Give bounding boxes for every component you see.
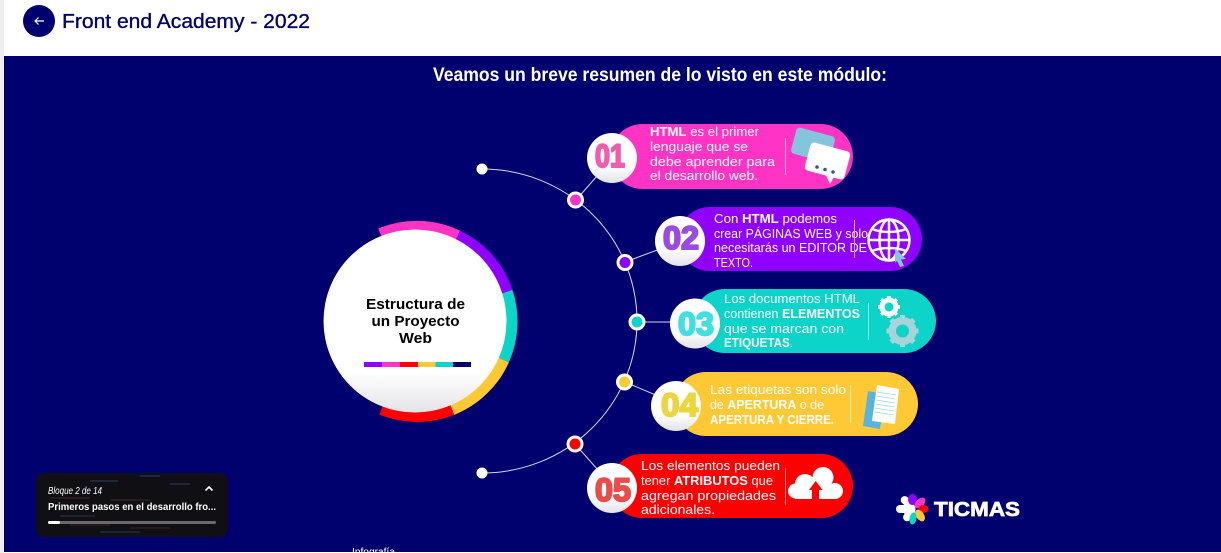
centre label: un Proyecto: [372, 313, 460, 330]
text 04: APERTURA Y CIERRE.: [710, 412, 834, 427]
back button icon: [23, 5, 55, 37]
progress card: [36, 473, 228, 537]
panel: item 03: [670, 289, 936, 353]
timeline node 3: [628, 314, 646, 330]
icon: cloud upload: [788, 467, 843, 499]
number badge 02: 02: [663, 220, 699, 256]
text 02: TEXTO.: [714, 255, 753, 270]
icon: gears: [878, 296, 918, 347]
number badge 03: 03: [678, 306, 714, 342]
panel: item 01: [587, 124, 853, 189]
timeline arc: [476, 164, 672, 478]
card title: Primeros pasos en el desarrollo fro...: [48, 502, 216, 513]
timeline node 2: [616, 254, 634, 271]
text 03: que se marcan con: [724, 321, 844, 336]
text 01: debe aprender para: [650, 154, 776, 169]
text 02: [714, 211, 868, 270]
number badge 02: [655, 216, 705, 266]
text 01: [650, 124, 776, 183]
number badge 01: 01: [595, 138, 625, 174]
panel: item 04: [651, 372, 918, 436]
logo: TICMAS: [896, 494, 1020, 525]
text 03: contienen ELEMENTOS: [724, 306, 860, 321]
card chevron icon: [206, 487, 212, 490]
text 03: ETIQUETAS.: [724, 335, 793, 350]
course title: Front end Academy - 2022: [62, 11, 310, 33]
centre label: [366, 296, 465, 347]
number badge 04: [651, 381, 701, 431]
panel: item 02: [655, 207, 922, 271]
number badge 04: 04: [661, 387, 698, 423]
text 03: [724, 291, 860, 350]
card progress bar: [48, 521, 216, 524]
timeline node 5: [566, 436, 584, 452]
large gear: [886, 315, 918, 347]
text 05: adicionales.: [641, 502, 715, 517]
number badge 03: [670, 298, 720, 348]
number badge 05: 05: [595, 472, 631, 508]
panel: item 05: [587, 454, 853, 518]
number badge 05: [587, 463, 637, 513]
central circle: Estructura de un Proyecto Web: [324, 227, 511, 415]
centre label: Estructura de: [366, 296, 465, 313]
heading: Veamos un breve resumen de lo visto en este módulo:: [433, 65, 887, 86]
timeline node 4: [616, 374, 633, 390]
text 04: de APERTURA o de: [710, 397, 824, 412]
logo flower: [896, 494, 928, 525]
logo wordmark: TICMAS: [934, 499, 1020, 521]
centre label: Web: [399, 330, 432, 347]
icon: globe with cursor: [868, 220, 910, 267]
text 01: HTML es el primer: [650, 124, 760, 139]
text 05: Los elementos pueden: [641, 458, 780, 473]
small gear: [878, 296, 900, 318]
text 01: el desarrollo web.: [650, 168, 758, 183]
card code texture: [50, 476, 190, 532]
text 02: necesitarás un EDITOR DE: [714, 240, 867, 255]
text 04: Las etiquetas son solo: [710, 382, 846, 397]
text 02: Con HTML podemos: [714, 211, 838, 226]
card block label: Bloque 2 de 14: [48, 486, 102, 497]
text 04: [710, 382, 846, 427]
text 05: tener ATRIBUTOS que: [641, 473, 773, 488]
connectors: [575, 176, 672, 470]
colour strip: [364, 362, 471, 367]
number badge 01: [587, 133, 637, 183]
header bar: [4, 0, 1221, 56]
icon: documents: [863, 385, 899, 429]
icon: chat bubbles: [790, 127, 851, 184]
segmented ring: [381, 227, 511, 415]
timeline node 1: [567, 192, 584, 208]
text 02: crear PÁGINAS WEB y solo: [714, 226, 868, 241]
text 05: agregan propiedades: [641, 488, 777, 503]
text 01: lenguaje que se: [650, 139, 748, 154]
text 05: [641, 458, 780, 517]
white disc: [324, 230, 506, 412]
text 03: Los documentos HTML: [724, 291, 860, 306]
